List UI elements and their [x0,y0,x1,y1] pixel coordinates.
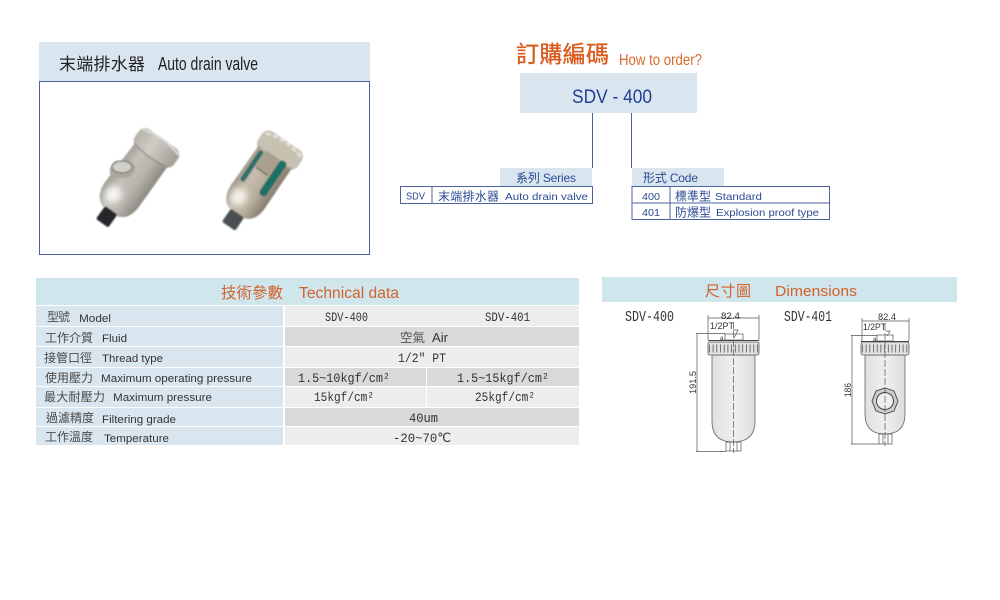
panel: dimensions [602,277,957,453]
row: maximum operating pressure: 使用壓力 [45,370,93,385]
drawing: SDV-400 dimensions: 82.4 [721,311,740,321]
drawing: SDV-400 dimensions: 191.5 [688,371,698,394]
order heading: 訂購編碼 [516,41,609,67]
icon: silver drain valve [83,125,182,237]
row: maximum pressure: 15kgf/cm² [314,390,374,405]
row: fluid [36,327,579,346]
row: temperature: -20~70℃ [393,431,451,446]
product image frame [40,82,370,254]
panel: technical data table [36,278,579,446]
row: maximum pressure [36,387,579,407]
drawing: SDV-401 dimensions: 186 [843,383,853,397]
drawing: SDV-401 dimensions [843,312,909,446]
row: temperature [36,427,579,446]
connector: code to type [630,113,632,168]
order code box [520,73,697,113]
label: SDV-400: SDV-400 [625,309,674,326]
row: model: Model [79,313,111,325]
row: maximum pressure: 25kgf/cm² [475,390,535,405]
drawing: SDV-400 dimensions [688,311,759,453]
code table [632,186,830,220]
row: model [36,306,579,326]
series table: Auto drain valve [505,191,588,203]
technical data heading: Technical data [299,285,399,302]
panel: product [39,42,370,254]
row: fluid: 工作介質 [45,330,93,345]
series table [400,186,592,204]
label: SDV-401: SDV-401 [784,309,832,326]
drawing: SDV-400 dimensions: 1/2PT [710,321,734,331]
drawing: SDV-401 dimensions: 82.4 [878,312,896,322]
drawing: SDV-401 dimensions: a [873,337,877,343]
row: temperature: Temperature [104,433,169,445]
code table: 401 [642,207,660,219]
row: maximum pressure: Maximum pressure [113,392,212,404]
row: fluid: Fluid [102,333,127,345]
drawing: SDV-401 dimensions: 1/2PT [863,322,886,332]
code table: 防爆型 [675,204,711,220]
code table: 標準型 [675,188,711,204]
order heading: How to order? [619,52,702,69]
row: maximum operating pressure: 1.5~10kgf/cm² [298,371,390,386]
row: thread type: 接管口徑 [44,350,92,365]
row: filtering grade [36,408,579,426]
row: maximum operating pressure: Maximum operating pressure [101,373,252,385]
code header [632,168,724,186]
product heading band [39,42,370,81]
row: thread type: 1/2" PT [398,351,446,366]
code table: 400 [642,191,660,203]
row: filtering grade: 40um [409,411,438,426]
technical data heading: 技術參數 [221,284,283,302]
icon: gold drain valve [209,127,306,240]
row: thread type [36,347,579,367]
panel: how to order [400,41,830,220]
row: maximum operating pressure [36,368,579,386]
row: model: 型號 [47,310,70,324]
series table: 末端排水器 [438,190,499,204]
series header: 系列 Series [516,171,576,185]
dimensions heading: 尺寸圖 [705,283,751,300]
row: filtering grade: 過濾精度 [46,410,94,425]
product heading band: 末端排水器 [59,55,145,74]
series table: SDV [406,192,425,202]
technical data heading [36,278,579,305]
drawing: SDV-400 dimensions: a [720,336,724,342]
code table: Standard [715,191,762,203]
order code box: SDV - 400 [572,87,652,108]
row: thread type: Thread type [102,353,163,365]
row: filtering grade: Filtering grade [102,414,176,426]
connector: code to series [592,113,594,168]
code header: 形式 Code [643,171,698,185]
code table: Explosion proof type [716,207,819,219]
row: model: SDV-401 [485,310,530,325]
dimensions heading [602,277,957,302]
row: fluid: Air [432,331,448,345]
row: fluid: 空氣 [400,330,425,345]
row: maximum pressure: 最大耐壓力 [44,390,105,404]
row: model: SDV-400 [325,310,368,325]
row: maximum operating pressure: 1.5~15kgf/cm² [457,371,549,386]
dimensions heading: Dimensions [775,283,857,300]
order heading [516,41,702,69]
series header [500,168,592,186]
row: temperature: 工作溫度 [45,429,93,444]
product heading band: Auto drain valve [158,54,258,74]
